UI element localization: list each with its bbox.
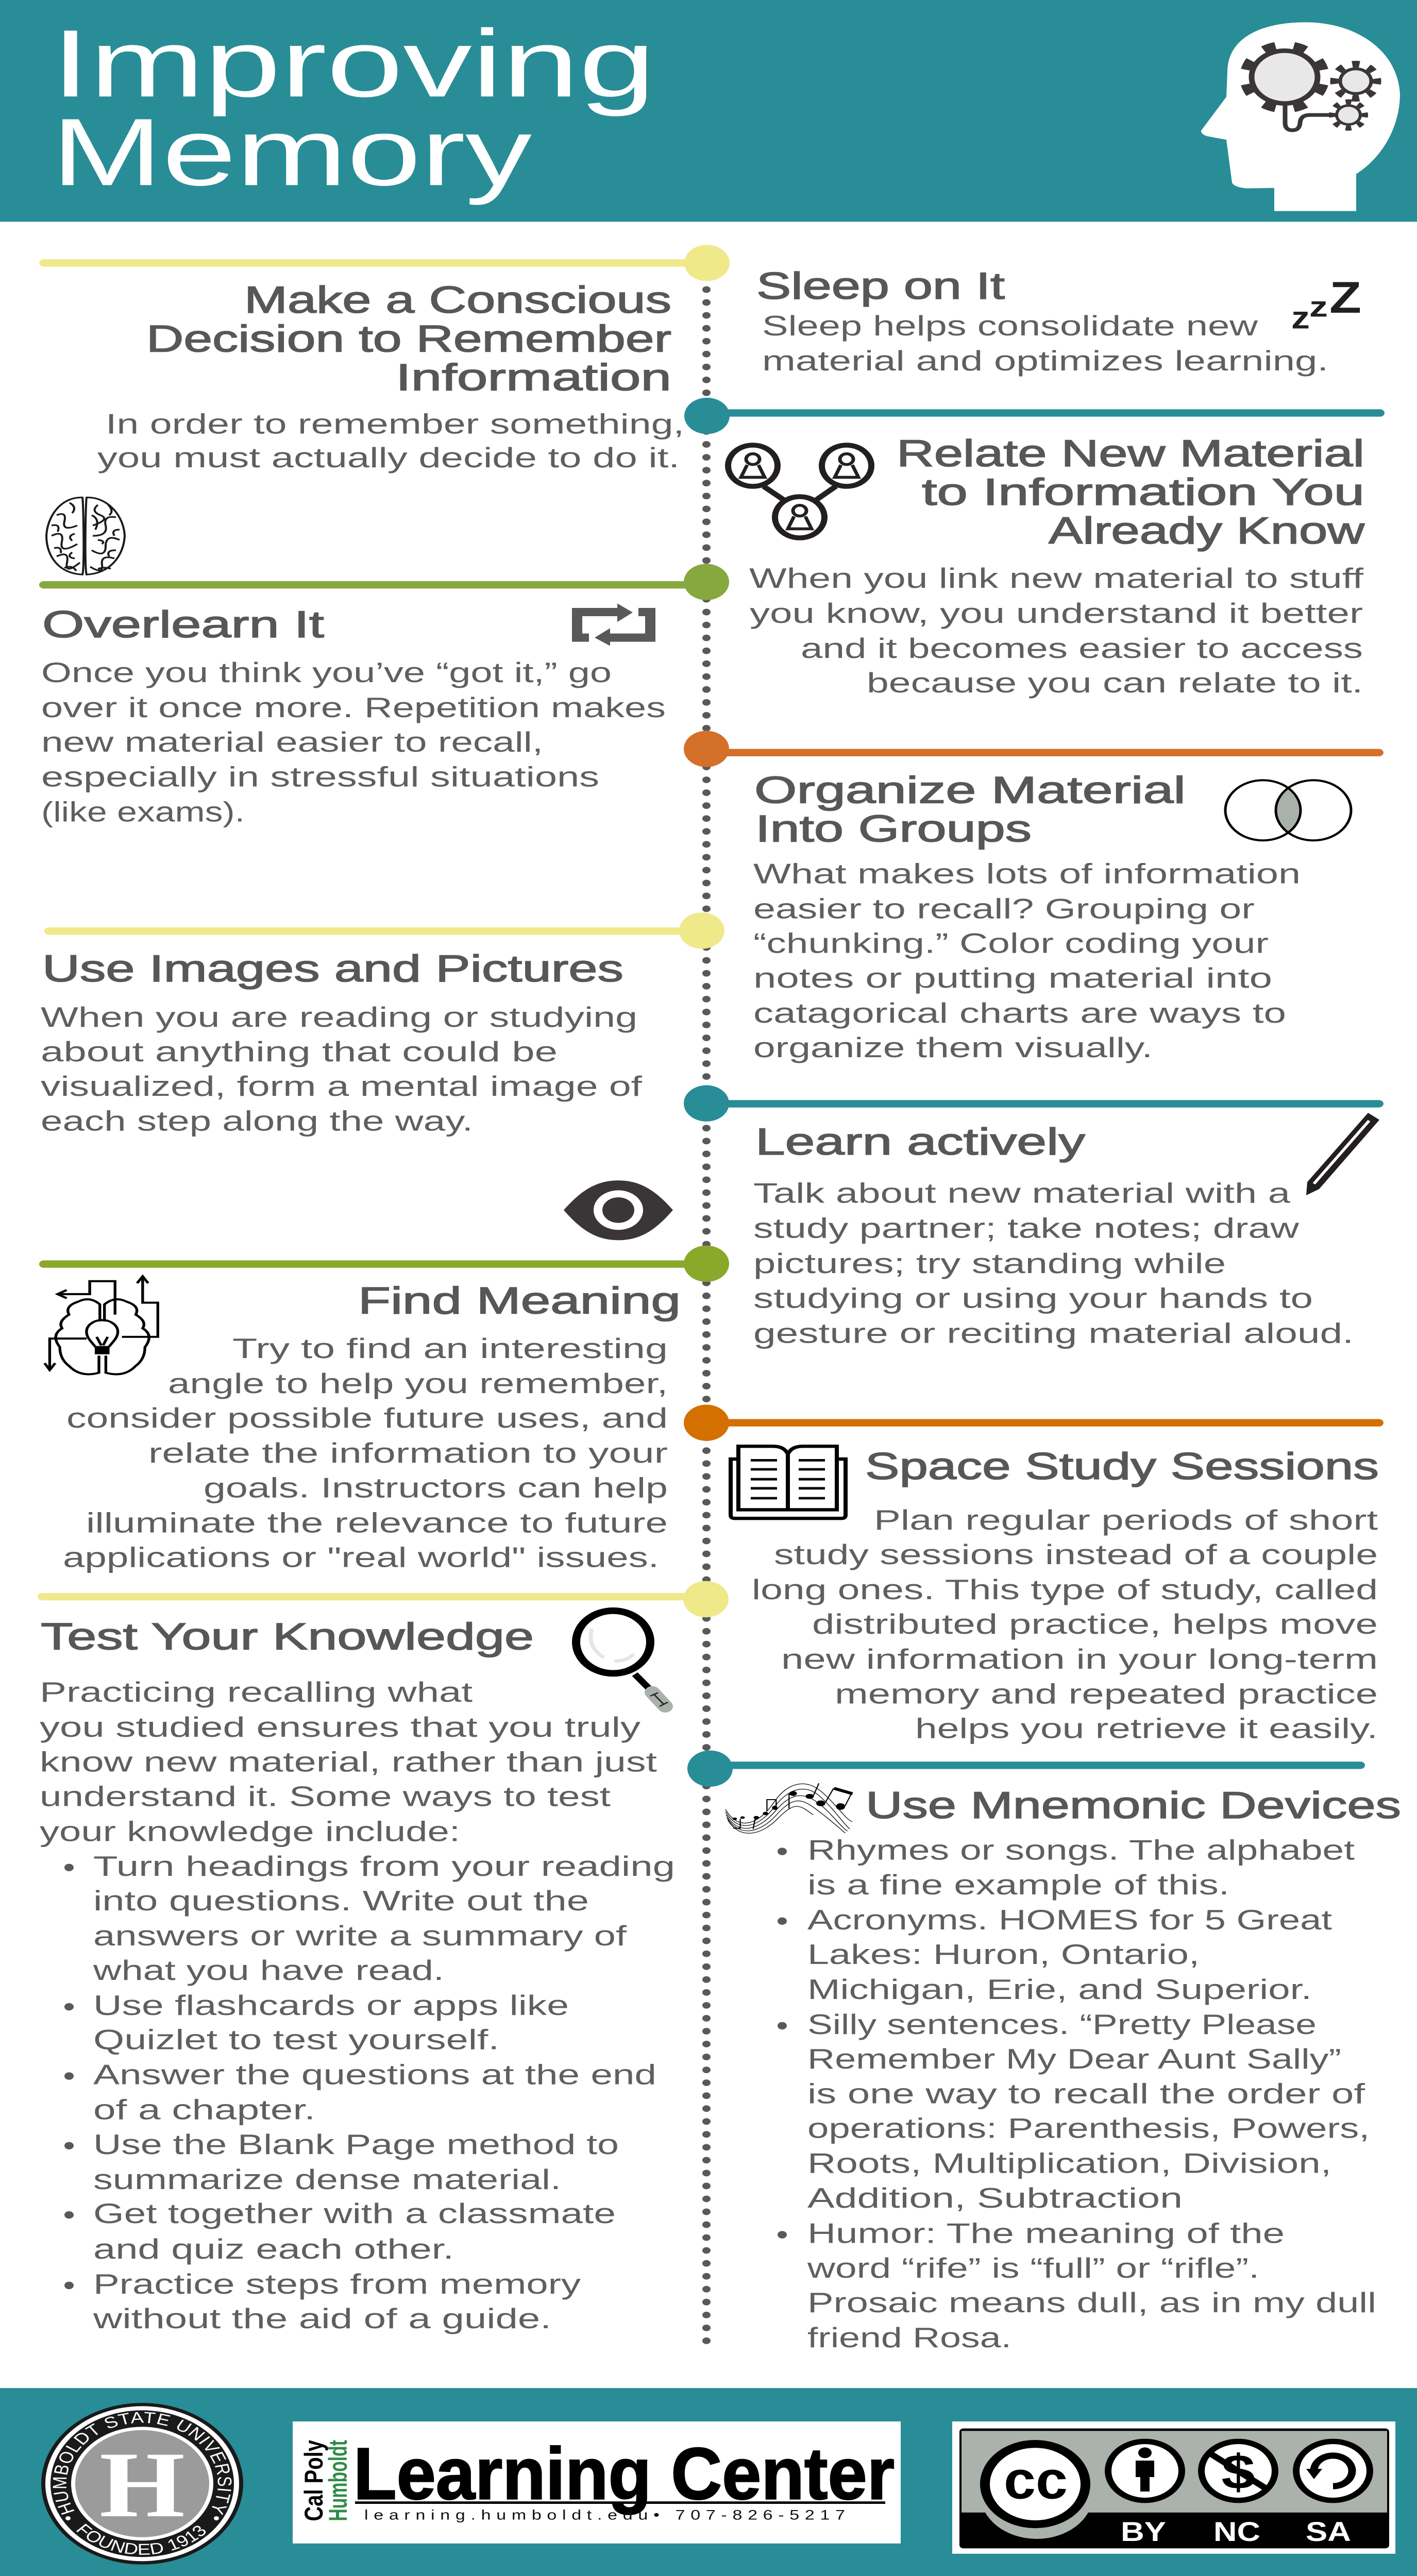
body text bbox=[753, 1178, 1354, 1349]
bullet list: Lakes: Huron, Ontario, bbox=[807, 1939, 1200, 1970]
body text: visualized, form a mental image of bbox=[41, 1071, 643, 1103]
heading: Use Images and Pictures bbox=[42, 947, 623, 990]
heading: Decision to Remember bbox=[146, 317, 671, 360]
icon: connected people bbox=[728, 445, 871, 538]
icon: zzz: z bbox=[1309, 291, 1328, 323]
badge: creative commons BY NC SA: $ bbox=[1221, 2445, 1255, 2499]
footer band bbox=[0, 2388, 1417, 2576]
body text: Practicing recalling what bbox=[40, 1677, 473, 1708]
body text bbox=[41, 657, 666, 828]
body text: Try to find an interesting bbox=[232, 1333, 668, 1364]
bullet list: Silly sentences. “Pretty Please bbox=[807, 2009, 1317, 2040]
body text: because you can relate to it. bbox=[867, 667, 1363, 699]
body text: goals. Instructors can help bbox=[204, 1472, 668, 1504]
bullet list: summarize dense material. bbox=[93, 2164, 561, 2195]
icon: head with gears bbox=[1201, 22, 1400, 211]
body text: pictures; try standing while bbox=[753, 1248, 1226, 1280]
body text: over it once more. Repetition makes bbox=[41, 692, 666, 723]
bullet list: Rhymes or songs. The alphabet bbox=[807, 1835, 1355, 1866]
icon: music staff bbox=[726, 1783, 853, 1833]
body text: When you are reading or studying bbox=[41, 1002, 637, 1033]
panel: relate new material bbox=[728, 432, 1365, 699]
body text: illuminate the relevance to future bbox=[86, 1507, 668, 1539]
body text: notes or putting material into bbox=[753, 962, 1272, 994]
badge: creative commons BY NC SA: BY bbox=[1121, 2516, 1166, 2547]
body text: Plan regular periods of short bbox=[874, 1504, 1378, 1536]
panel: learn actively bbox=[753, 1113, 1379, 1349]
title bbox=[52, 10, 655, 206]
bullet list: friend Rosa. bbox=[807, 2322, 1011, 2353]
body text bbox=[40, 1677, 657, 1848]
panel: use images and pictures bbox=[41, 947, 673, 1240]
bullet list: what you have read. bbox=[93, 1955, 444, 1987]
icon: venn diagram bbox=[1225, 780, 1351, 840]
body text: material and optimizes learning. bbox=[762, 346, 1328, 377]
body text: distributed practice, helps move bbox=[812, 1609, 1378, 1640]
body text: you must actually decide to do it. bbox=[97, 443, 680, 474]
bullet list: is one way to recall the order of bbox=[807, 2078, 1365, 2110]
body text bbox=[63, 1333, 668, 1573]
panel: test your knowledge bbox=[40, 1611, 675, 2335]
body text: easier to recall? Grouping or bbox=[753, 893, 1255, 925]
icon: brain with light bulb and arrows bbox=[45, 1276, 158, 1374]
badge: creative commons BY NC SA bbox=[952, 2421, 1395, 2554]
panel: use mnemonic devices bbox=[726, 1783, 1401, 2353]
heading: Sleep on It bbox=[756, 265, 1005, 307]
body text: What makes lots of information bbox=[753, 858, 1301, 890]
heading: Information bbox=[396, 356, 671, 399]
icon: pencil bbox=[1306, 1113, 1379, 1195]
body text: understand it. Some ways to test bbox=[40, 1781, 611, 1812]
body text: Sleep helps consolidate new bbox=[762, 311, 1258, 342]
body text: “chunking.” Color coding your bbox=[753, 928, 1269, 959]
panel: find meaning bbox=[45, 1276, 681, 1573]
bullet list: is a fine example of this. bbox=[807, 1869, 1229, 1901]
icon: zzz: Z bbox=[1329, 273, 1361, 323]
body text: helps you retrieve it easily. bbox=[915, 1713, 1378, 1744]
heading: Make a Conscious bbox=[244, 279, 671, 321]
icon: brain bbox=[46, 498, 125, 574]
logo: learning center bbox=[293, 2421, 901, 2544]
body text: your knowledge include: bbox=[40, 1816, 460, 1848]
body text: catagorical charts are ways to bbox=[753, 997, 1286, 1029]
bullet list: operations: Parenthesis, Powers, bbox=[807, 2113, 1370, 2144]
bullet list: of a chapter. bbox=[93, 2094, 315, 2126]
bullet list: Get together with a classmate bbox=[93, 2198, 616, 2230]
timeline bars and nodes bbox=[38, 245, 1385, 1787]
body text: consider possible future uses, and bbox=[66, 1403, 668, 1434]
logo: learning center: Humboldt bbox=[324, 2440, 352, 2521]
panel: space study sessions bbox=[731, 1445, 1379, 1744]
body text: know new material, rather than just bbox=[40, 1747, 657, 1778]
body text: Talk about new material with a bbox=[753, 1178, 1291, 1209]
seal: Humboldt State University: H bbox=[99, 2432, 185, 2537]
bullet list: Humor: The meaning of the bbox=[807, 2218, 1285, 2249]
heading: Organize Material bbox=[754, 769, 1186, 811]
body text bbox=[97, 409, 684, 474]
bullet list: and quiz each other. bbox=[93, 2233, 454, 2265]
body text: new information in your long-term bbox=[781, 1644, 1378, 1675]
body text: you studied ensures that you truly bbox=[40, 1712, 640, 1743]
body text bbox=[749, 563, 1364, 699]
bullet list bbox=[778, 1835, 1376, 2353]
bullet list: Answer the questions at the end bbox=[93, 2059, 656, 2091]
bullet list: Use flashcards or apps like bbox=[93, 1990, 569, 2022]
body text: memory and repeated practice bbox=[835, 1679, 1378, 1710]
heading bbox=[754, 769, 1186, 850]
icon: zzz bbox=[1291, 273, 1361, 335]
header band bbox=[0, 0, 1417, 222]
body text: (like exams). bbox=[41, 796, 245, 828]
bullet list: Quizlet to test yourself. bbox=[93, 2024, 499, 2056]
seal: Humboldt State University: FOUNDED 1913 bbox=[76, 2523, 206, 2555]
bullet list: without the aid of a guide. bbox=[93, 2303, 551, 2335]
panel: make a conscious decision bbox=[46, 279, 684, 574]
body text: study partner; take notes; draw bbox=[753, 1213, 1300, 1244]
icon: open book bbox=[731, 1446, 846, 1518]
icon: zzz: z bbox=[1291, 300, 1310, 335]
body text: each step along the way. bbox=[41, 1106, 473, 1137]
body text: angle to help you remember, bbox=[168, 1368, 668, 1399]
icon: magnifying glass bbox=[576, 1611, 668, 1706]
bullet list: into questions. Write out the bbox=[93, 1885, 589, 1917]
bullet list: Roots, Multiplication, Division, bbox=[807, 2148, 1331, 2179]
icon: repeat arrows bbox=[577, 603, 650, 646]
body text: especially in stressful situations bbox=[41, 761, 599, 793]
badge: creative commons BY NC SA: SA bbox=[1306, 2516, 1351, 2547]
body text: relate the information to your bbox=[148, 1438, 668, 1469]
central dotted timeline bbox=[702, 264, 711, 2345]
body text: long ones. This type of study, called bbox=[752, 1574, 1378, 1605]
title: Memory bbox=[52, 98, 532, 206]
body text: applications or "real world" issues. bbox=[63, 1542, 659, 1573]
icon: eye bbox=[564, 1180, 673, 1240]
body text bbox=[41, 1002, 643, 1137]
bullet list bbox=[64, 1851, 675, 2335]
title: Improving bbox=[52, 10, 655, 117]
body text: about anything that could be bbox=[41, 1036, 558, 1067]
heading: to Information You bbox=[922, 471, 1364, 513]
body text bbox=[762, 311, 1328, 377]
logo: learning center: learning.humboldt.edu• 707-826-5217 bbox=[364, 2507, 845, 2523]
body text: Once you think you’ve “got it,” go bbox=[41, 657, 612, 688]
bullet list: Remember My Dear Aunt Sally” bbox=[807, 2044, 1341, 2075]
heading: Use Mnemonic Devices bbox=[866, 1784, 1401, 1826]
bullet list: Practice steps from memory bbox=[93, 2268, 581, 2300]
heading: Overlearn It bbox=[42, 603, 324, 646]
panel: sleep on it bbox=[756, 265, 1361, 377]
heading: Relate New Material bbox=[897, 432, 1364, 474]
body text: When you link new material to stuff bbox=[749, 563, 1364, 594]
body text: new material easier to recall, bbox=[41, 727, 543, 758]
bullet list: Acronyms. HOMES for 5 Great bbox=[807, 1904, 1332, 1936]
bullet list: Turn headings from your reading bbox=[93, 1851, 675, 1882]
badge: creative commons BY NC SA: NC bbox=[1213, 2516, 1260, 2547]
heading bbox=[897, 432, 1365, 552]
panel: overlearn it bbox=[41, 603, 666, 828]
body text bbox=[753, 858, 1301, 1063]
bullet list: Addition, Subtraction bbox=[807, 2182, 1183, 2214]
seal: Humboldt State University bbox=[41, 2403, 243, 2565]
bullet list: answers or write a summary of bbox=[93, 1920, 627, 1952]
bullet list: Michigan, Erie, and Superior. bbox=[807, 1974, 1312, 2005]
heading: Find Meaning bbox=[358, 1279, 681, 1322]
seal: Humboldt State University: HUMBOLDT STATE UNIVERSITY bbox=[53, 2412, 232, 2515]
panel: organize material bbox=[753, 769, 1351, 1063]
bullet list: Prosaic means dull, as in my dull bbox=[807, 2287, 1376, 2318]
bullet list: word “rife” is “full” or “rifle”. bbox=[807, 2252, 1259, 2284]
body text: organize them visually. bbox=[753, 1032, 1153, 1063]
logo: learning center: Cal Poly bbox=[299, 2440, 328, 2521]
heading bbox=[146, 279, 671, 399]
badge: creative commons BY NC SA: cc bbox=[1004, 2450, 1068, 2510]
bullet list: Use the Blank Page method to bbox=[93, 2129, 619, 2160]
body text: gesture or reciting material aloud. bbox=[753, 1318, 1354, 1349]
body text bbox=[752, 1504, 1378, 1744]
heading: Learn actively bbox=[755, 1121, 1085, 1163]
body text: you know, you understand it better bbox=[750, 598, 1363, 629]
body text: studying or using your hands to bbox=[753, 1283, 1313, 1314]
heading: Space Study Sessions bbox=[865, 1445, 1379, 1487]
body text: In order to remember something, bbox=[106, 409, 684, 440]
heading: Into Groups bbox=[755, 807, 1032, 850]
body text: study sessions instead of a couple bbox=[774, 1539, 1378, 1570]
heading: Test Your Knowledge bbox=[41, 1615, 534, 1658]
heading: Already Know bbox=[1049, 510, 1365, 552]
logo: learning center: Learning Center bbox=[353, 2433, 895, 2515]
body text: and it becomes easier to access bbox=[801, 633, 1363, 664]
